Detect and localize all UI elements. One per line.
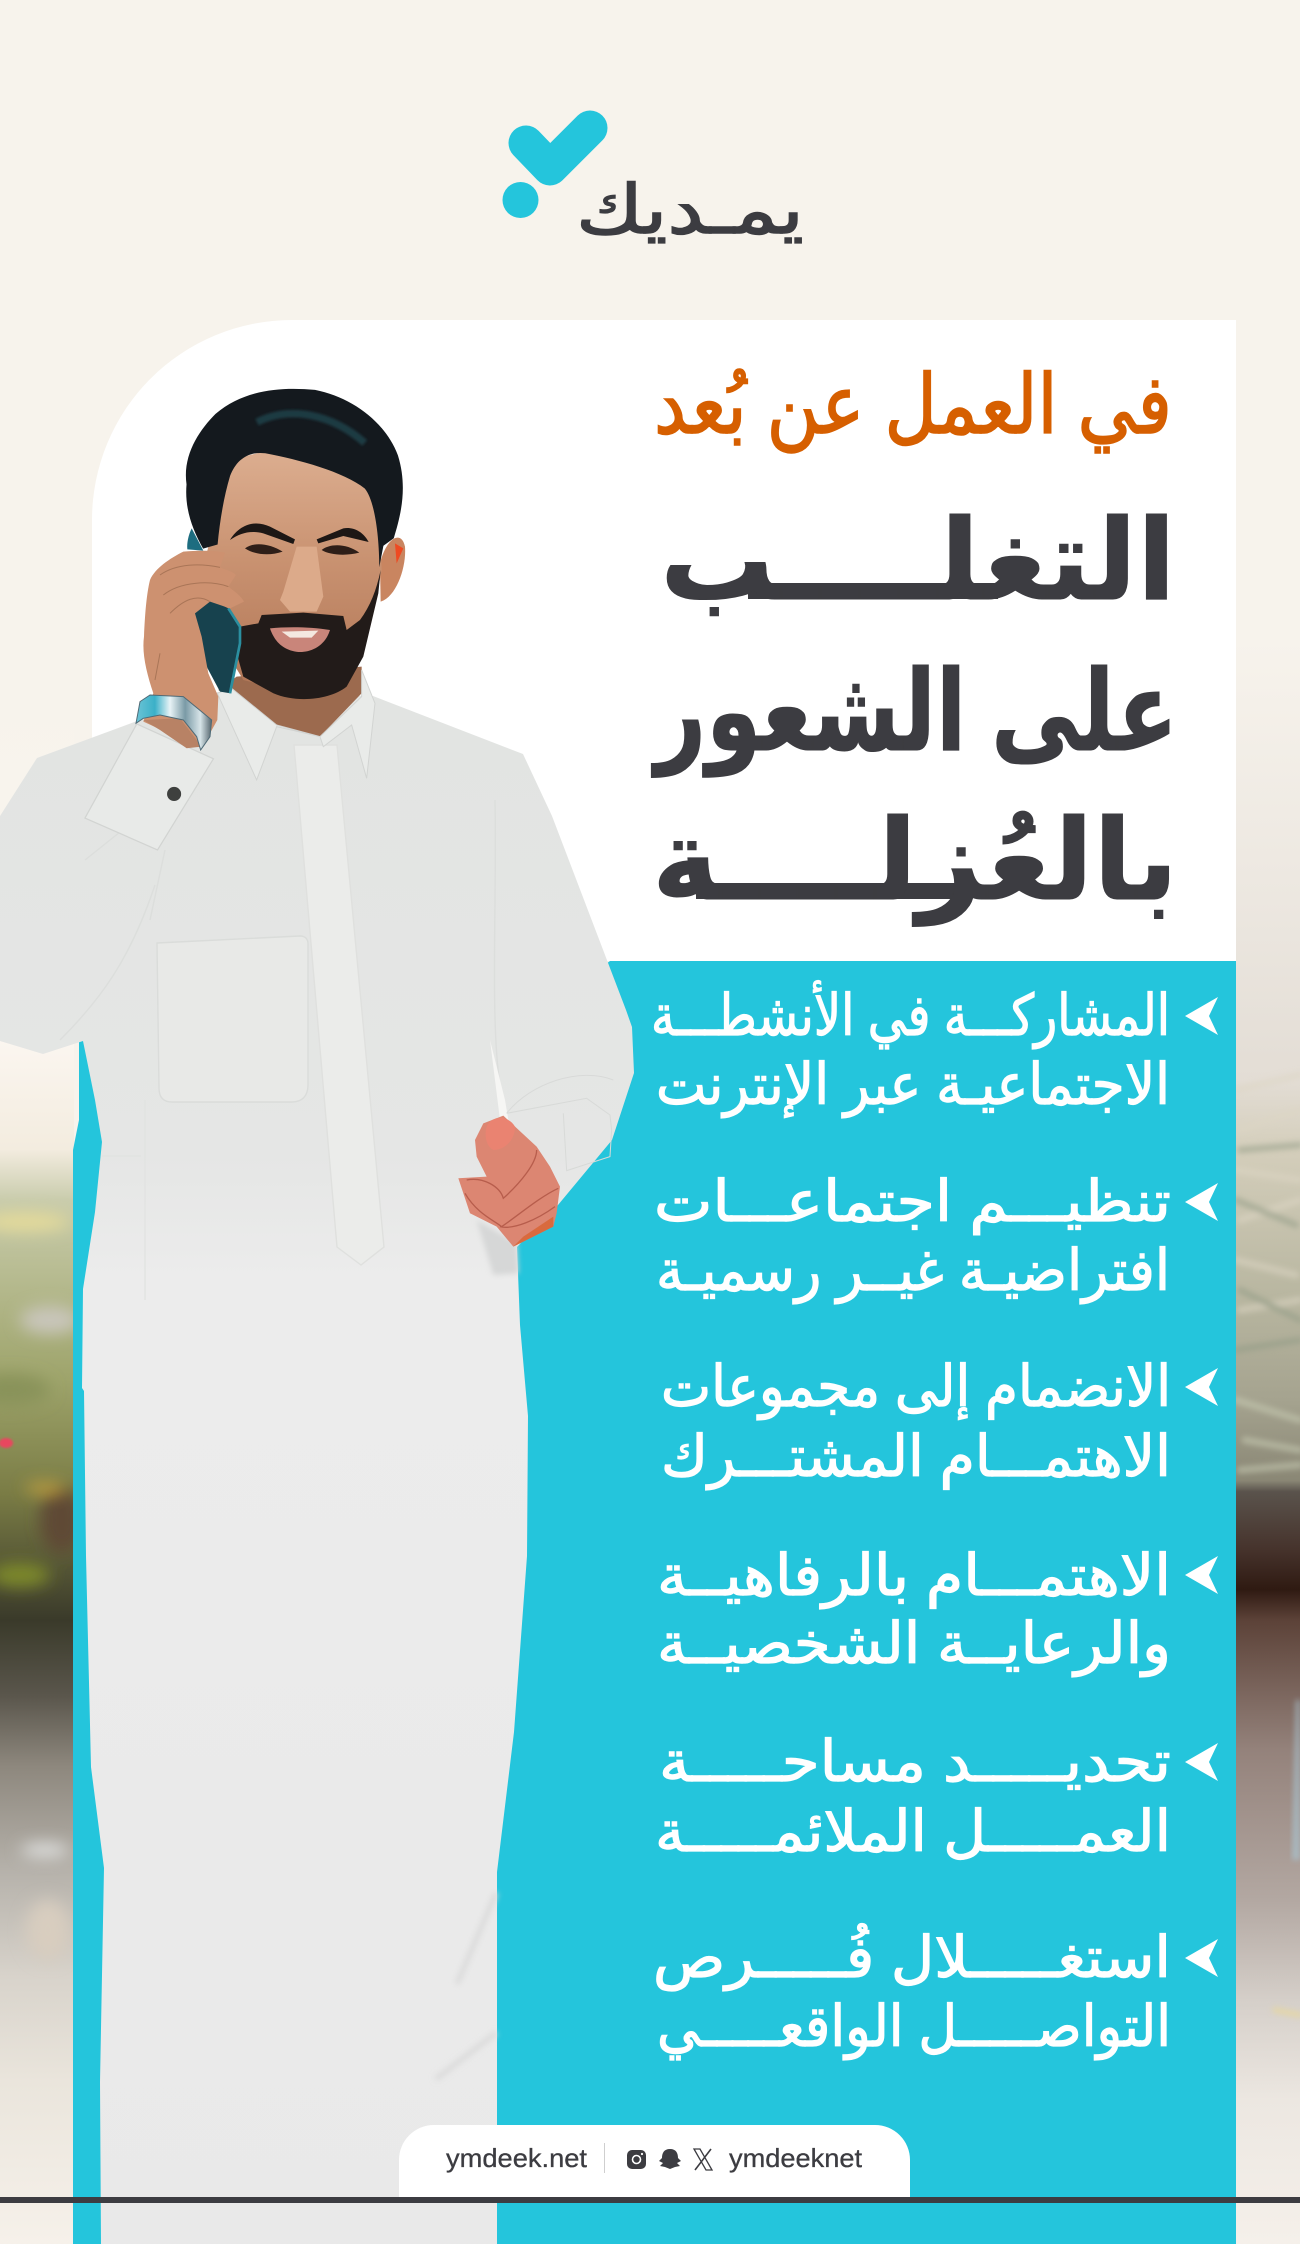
thobe lower folds	[436, 1893, 496, 2079]
tip 4: والرعايــة الشخصيــة	[657, 1612, 1171, 1677]
ear	[380, 538, 405, 602]
thobe placket	[294, 745, 384, 1265]
divider	[604, 2143, 605, 2173]
knuckle glow	[513, 1217, 553, 1247]
hair highlight	[257, 414, 365, 443]
finger lines	[155, 565, 228, 680]
title line 2: على الشعور	[651, 649, 1178, 777]
hand holding phone	[143, 551, 244, 748]
finger shading	[465, 1150, 558, 1227]
teeth	[282, 631, 318, 638]
tip 3: الاهتمـــام المشتـــرك	[661, 1425, 1171, 1490]
logo wordmark: يمـديك	[576, 172, 804, 248]
cufflink	[167, 787, 181, 801]
title line 3: بالعُزلــــة	[652, 798, 1178, 926]
thumb	[486, 1118, 515, 1150]
right sleeve cuff and fist	[458, 1075, 613, 1275]
footer pill	[399, 2125, 910, 2197]
tip 5: تحديـــــد مساحـــــة	[659, 1730, 1171, 1794]
tip 2: تنظيـــم اجتماعـــات	[654, 1170, 1171, 1235]
eyebrows	[230, 523, 369, 544]
panel: cyan list background	[73, 961, 1236, 2244]
icon: X	[694, 2149, 712, 2170]
title	[651, 498, 1178, 926]
tip 6: التواصـــــل الواقعـــــي	[657, 1995, 1171, 2060]
tip 6: استغـــــلال فُـــــرص	[653, 1922, 1171, 1991]
thobe body	[0, 692, 634, 2244]
tip 1: الاجتماعيـة عبر الإنترنت	[656, 1053, 1170, 1119]
watch	[136, 695, 212, 750]
logo mark: check	[526, 128, 590, 168]
bottom rule	[0, 2197, 1300, 2203]
logo mark: dot	[502, 182, 538, 218]
thobe pocket	[157, 936, 308, 1102]
tip 1: المشاركـــة في الأنشطـــة	[651, 980, 1170, 1049]
thobe shading	[60, 800, 500, 1300]
phone top	[187, 528, 203, 551]
handle: ymdeeknet	[729, 2143, 863, 2173]
head and hand detail	[136, 450, 405, 780]
tip 1	[651, 980, 1218, 1119]
tip 6	[653, 1922, 1218, 2060]
fist	[458, 1116, 560, 1247]
logo	[502, 128, 804, 248]
website: ymdeek.net	[446, 2143, 588, 2173]
ear highlight	[395, 543, 403, 563]
tip 5: العمـــــل الملائمـــــة	[655, 1800, 1171, 1864]
cuff lines	[507, 1075, 613, 1171]
hair	[186, 389, 403, 567]
nose	[280, 547, 323, 612]
person in white thobe	[0, 389, 634, 2244]
tip 3	[661, 1355, 1218, 1490]
beard	[237, 570, 381, 699]
right sleeve gap highlight	[490, 1040, 510, 1130]
face	[207, 450, 382, 693]
shadow under fist	[477, 1220, 518, 1275]
right blurred photo strip	[1236, 814, 1300, 2164]
panel: white title card	[92, 320, 1236, 961]
eyes	[245, 544, 359, 555]
phone edge	[228, 608, 240, 693]
title line 1: التغلــــب	[660, 498, 1176, 623]
tip 2	[654, 1170, 1218, 1304]
tip 2: افتراضيـة غيــر رسميـة	[656, 1239, 1170, 1304]
tip 3: الانضمام إلى مجموعات	[661, 1355, 1171, 1421]
icon: instagram	[627, 2150, 646, 2169]
neck	[218, 667, 362, 737]
collar	[217, 670, 375, 780]
footer bar	[399, 2125, 910, 2197]
left blurred photo strip	[0, 1118, 74, 2174]
wrist	[143, 718, 202, 748]
tip 4	[657, 1544, 1218, 1677]
icon: snapchat	[659, 2149, 681, 2169]
lips	[270, 627, 330, 652]
tip 4: الاهتمـــام بالرفاهيــة	[657, 1544, 1171, 1609]
upper-body detail: sleeve cuff	[85, 724, 213, 850]
subtitle: في العمل عن بُعد	[654, 360, 1172, 453]
list of tips	[651, 980, 1218, 2060]
tip 5	[655, 1730, 1218, 1864]
phone body	[193, 598, 240, 693]
